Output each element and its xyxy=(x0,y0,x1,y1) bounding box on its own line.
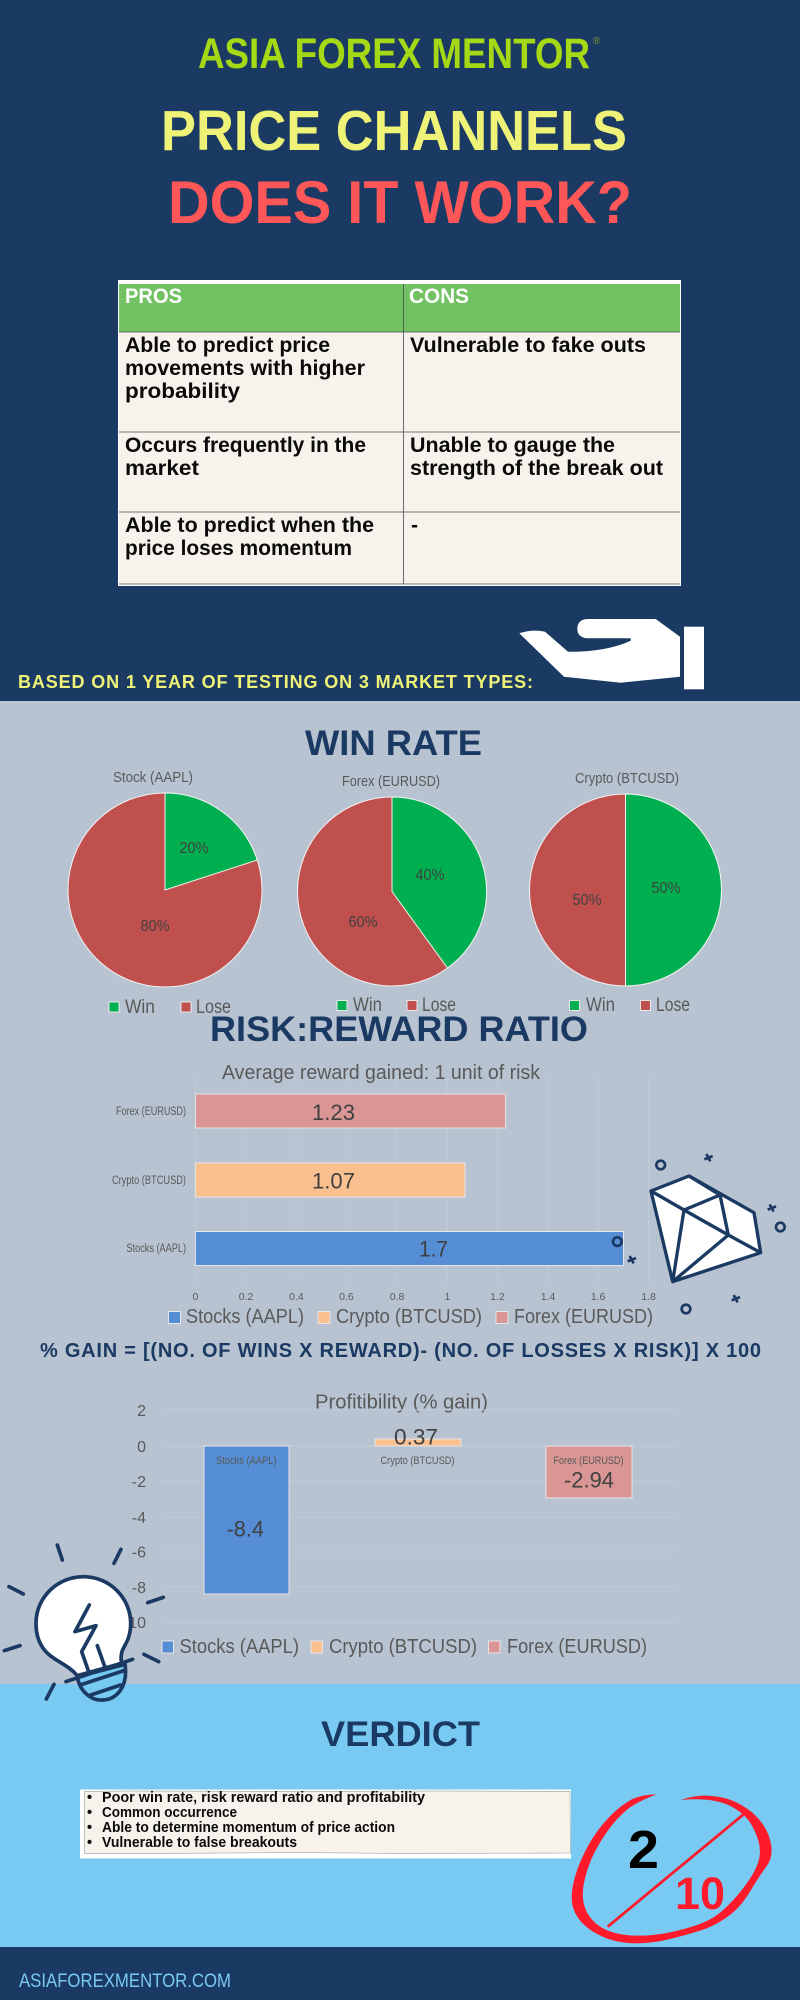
pros row 2: Occurs frequently in the xyxy=(125,434,366,457)
column chart: profitability: -10 xyxy=(123,1615,146,1632)
column chart: profitability: Forex (EURUSD) xyxy=(554,1455,624,1467)
pie chart: crypto: Lose xyxy=(656,995,690,1016)
bar chart: average reward: Stocks (AAPL) xyxy=(186,1306,304,1328)
bar chart: average reward: Forex (EURUSD) xyxy=(116,1106,186,1118)
slash xyxy=(608,1812,746,1927)
bar chart: average reward: 1.23 xyxy=(312,1100,355,1125)
column chart: profitability: -8.4 xyxy=(226,1516,264,1542)
pros row 1 xyxy=(125,334,365,403)
logo: ASIA FOREX MENTOR xyxy=(198,30,590,78)
cons row 1: Vulnerable to fake outs xyxy=(410,334,646,357)
panel: verdict notes: • xyxy=(87,1835,92,1851)
heading: risk reward ratio: RISK:REWARD RATIO xyxy=(210,1010,588,1049)
column chart: profitability: Crypto (BTCUSD) xyxy=(329,1636,477,1658)
bar: crypto xyxy=(375,1439,461,1446)
panel: verdict notes: • xyxy=(87,1790,92,1806)
cons row 2: strength of the break out xyxy=(410,457,663,480)
pros row 3: price loses momentum xyxy=(125,537,352,560)
column chart: profitability: -2 xyxy=(132,1474,146,1491)
panel: verdict notes: Vulnerable to false breakouts xyxy=(102,1835,297,1851)
pie chart: crypto: 50% xyxy=(652,880,680,897)
panel: footer background xyxy=(0,1947,800,2000)
column chart: profitability: 0 xyxy=(137,1439,146,1456)
bar chart: average reward: 0 xyxy=(192,1291,198,1303)
pie chart: crypto: Crypto (BTCUSD) xyxy=(575,770,679,787)
pie chart: stock: 20% xyxy=(180,840,208,857)
pros row 1: probability xyxy=(125,380,240,403)
panel: statistics background xyxy=(0,701,800,1684)
cons row 2 xyxy=(410,434,663,480)
column chart: profitability: Stocks (AAPL) xyxy=(180,1636,299,1658)
number 2: 2 xyxy=(628,1820,659,1880)
pie chart: forex: 40% xyxy=(416,867,444,884)
pros row 2: market xyxy=(125,457,199,480)
panel: verdict notes: • xyxy=(87,1820,92,1836)
pie chart: crypto: Win xyxy=(586,995,615,1016)
bar chart: average reward: Stocks (AAPL) xyxy=(126,1243,186,1255)
column chart: profitability: -4 xyxy=(132,1510,146,1527)
pros row 3: Able to predict when the xyxy=(125,514,374,537)
pie chart: stock: Lose xyxy=(196,997,231,1018)
bar chart: average reward: 1 xyxy=(444,1291,450,1303)
column chart: profitability: -6 xyxy=(132,1544,146,1562)
cons row 2: Unable to gauge the xyxy=(410,434,615,457)
bar chart: average reward: 0.8 xyxy=(390,1291,404,1303)
panel: header background xyxy=(0,0,800,701)
icon: diamond with sparkles xyxy=(613,1154,785,1313)
table header: cons: CONS xyxy=(409,285,469,308)
heading: win rate: WIN RATE xyxy=(305,724,482,763)
bar chart: average reward: 0.2 xyxy=(239,1291,253,1303)
bar chart: average reward: 0.6 xyxy=(339,1291,354,1303)
heading: verdict: VERDICT xyxy=(321,1715,480,1754)
pie chart: stock: Stock (AAPL) xyxy=(113,769,193,786)
title: price channels: PRICE CHANNELS xyxy=(161,99,627,163)
pros row 2 xyxy=(125,434,366,480)
pie chart: forex: 60% xyxy=(348,914,378,931)
pie chart: crypto: 50% xyxy=(572,892,602,909)
column chart: profitability: -8 xyxy=(132,1580,146,1597)
icon: light bulb xyxy=(4,1545,163,1700)
panel: verdict background xyxy=(0,1684,800,1947)
column chart: profitability xyxy=(123,1390,674,1658)
bar chart: average reward: 1.07 xyxy=(312,1168,355,1194)
bar chart: average reward: 0.4 xyxy=(289,1291,304,1303)
panel: verdict notes: Able to determine momentum of price action xyxy=(102,1820,395,1836)
number 10: 10 xyxy=(675,1868,725,1919)
hand-drawn red circle xyxy=(572,1794,772,1943)
subheading: based on testing: BASED ON 1 YEAR OF TESTING ON 3 MARKET TYPES: xyxy=(18,672,533,692)
pros row 1: Able to predict price xyxy=(125,334,330,357)
cons row 3: - xyxy=(411,514,418,537)
column chart: profitability: Profitibility (% gain) xyxy=(315,1390,488,1414)
column chart: profitability: 0.37 xyxy=(394,1424,438,1450)
footer url: ASIAFOREXMENTOR.COM xyxy=(19,1971,231,1992)
bar: crypto xyxy=(195,1163,465,1197)
bar chart: average reward: Average reward gained: 1 unit of risk xyxy=(222,1062,541,1084)
bar: forex xyxy=(546,1446,632,1498)
column chart: profitability: Crypto (BTCUSD) xyxy=(380,1455,454,1467)
bar chart: average reward: 1.8 xyxy=(641,1291,656,1303)
column chart: profitability: Forex (EURUSD) xyxy=(507,1636,647,1658)
table header: pros: PROS xyxy=(125,285,182,308)
pros row 1: movements with higher xyxy=(125,357,365,380)
bar chart: average reward: Crypto (BTCUSD) xyxy=(336,1306,482,1328)
logo: ® xyxy=(593,36,601,47)
formula: percent gain: % GAIN = [(NO. OF WINS X REWARD)- (NO. OF LOSSES X RISK)] X 100 xyxy=(40,1340,761,1362)
pie chart: stock xyxy=(68,769,262,1018)
panel: verdict notes: Poor win rate, risk reward ratio and profitability xyxy=(102,1790,425,1806)
column chart: profitability: -2.94 xyxy=(564,1468,614,1492)
title: does it work: DOES IT WORK? xyxy=(168,169,632,236)
panel: verdict notes xyxy=(80,1790,571,1858)
pie chart: crypto xyxy=(530,770,722,1016)
pie chart: forex xyxy=(298,773,487,1016)
pie chart: stock: 80% xyxy=(140,918,170,935)
pie chart: forex: Win xyxy=(353,995,382,1016)
column chart: profitability: Stocks (AAPL) xyxy=(216,1455,276,1467)
pros row 3 xyxy=(125,514,374,560)
pie chart: forex: Forex (EURUSD) xyxy=(342,773,440,790)
panel: verdict notes: Common occurrence xyxy=(102,1805,237,1821)
panel: verdict notes: • xyxy=(87,1805,92,1821)
bar chart: average reward: 1.6 xyxy=(591,1291,605,1303)
bar chart: average reward xyxy=(112,1062,656,1328)
panel: pros and cons table xyxy=(118,280,681,586)
icon: open hand xyxy=(519,619,704,689)
bar chart: average reward: 1.2 xyxy=(490,1291,505,1303)
bar: stocks xyxy=(195,1232,624,1266)
bar chart: average reward: Forex (EURUSD) xyxy=(514,1306,653,1328)
column chart: profitability: 2 xyxy=(137,1403,146,1420)
bar: stocks xyxy=(204,1446,289,1594)
pie chart: stock: Win xyxy=(125,997,155,1018)
bar chart: average reward: Crypto (BTCUSD) xyxy=(112,1175,186,1187)
bar: forex xyxy=(195,1094,506,1128)
bar chart: average reward: 1.7 xyxy=(419,1236,448,1262)
pie chart: forex: Lose xyxy=(422,995,456,1016)
score: 2 out of 10 xyxy=(572,1794,772,1943)
bar chart: average reward: 1.4 xyxy=(541,1291,555,1303)
